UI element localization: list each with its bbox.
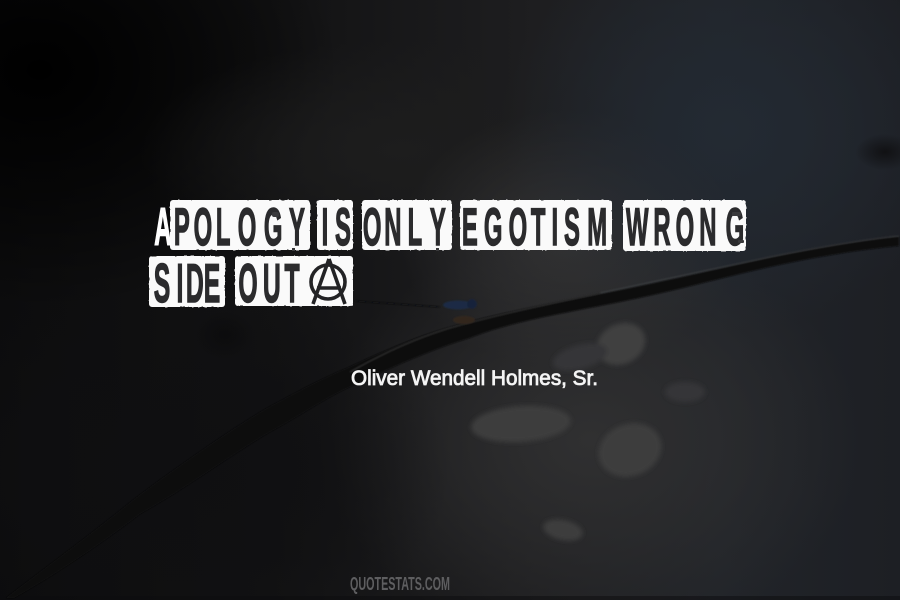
box: IS [317,200,353,250]
quote line 1: APOLOGY [154,197,305,257]
quote line 1 [154,197,744,257]
author attribution: Oliver Wendell Holmes, Sr. [351,367,598,390]
box: WRONG [623,200,746,251]
watermark: QuoteStats.com: QUOTESTATS.COM [350,574,450,594]
box: ONLY [362,200,452,250]
quote line 2 [154,253,300,315]
quote line 1: IS [322,197,351,257]
quote line 1: WRONG [626,197,744,257]
dragonfly on branch [355,299,477,324]
branch [6,236,899,598]
quote line 1: EGOTISM [462,197,607,257]
distress specks on boxes [272,212,744,251]
box: SIDE [149,256,225,307]
quote line 1: ONLY [363,197,446,257]
box: OUT and anarchy symbol [235,256,353,306]
quote text: white tape boxes [149,197,746,315]
box: POLOGY [149,200,746,307]
quote line 2: SIDE [154,253,220,315]
box: EGOTISM [460,200,612,250]
bokeh light spots [470,315,705,544]
quote line 2: OUT [238,253,300,315]
icon: anarchy symbol [311,259,345,304]
